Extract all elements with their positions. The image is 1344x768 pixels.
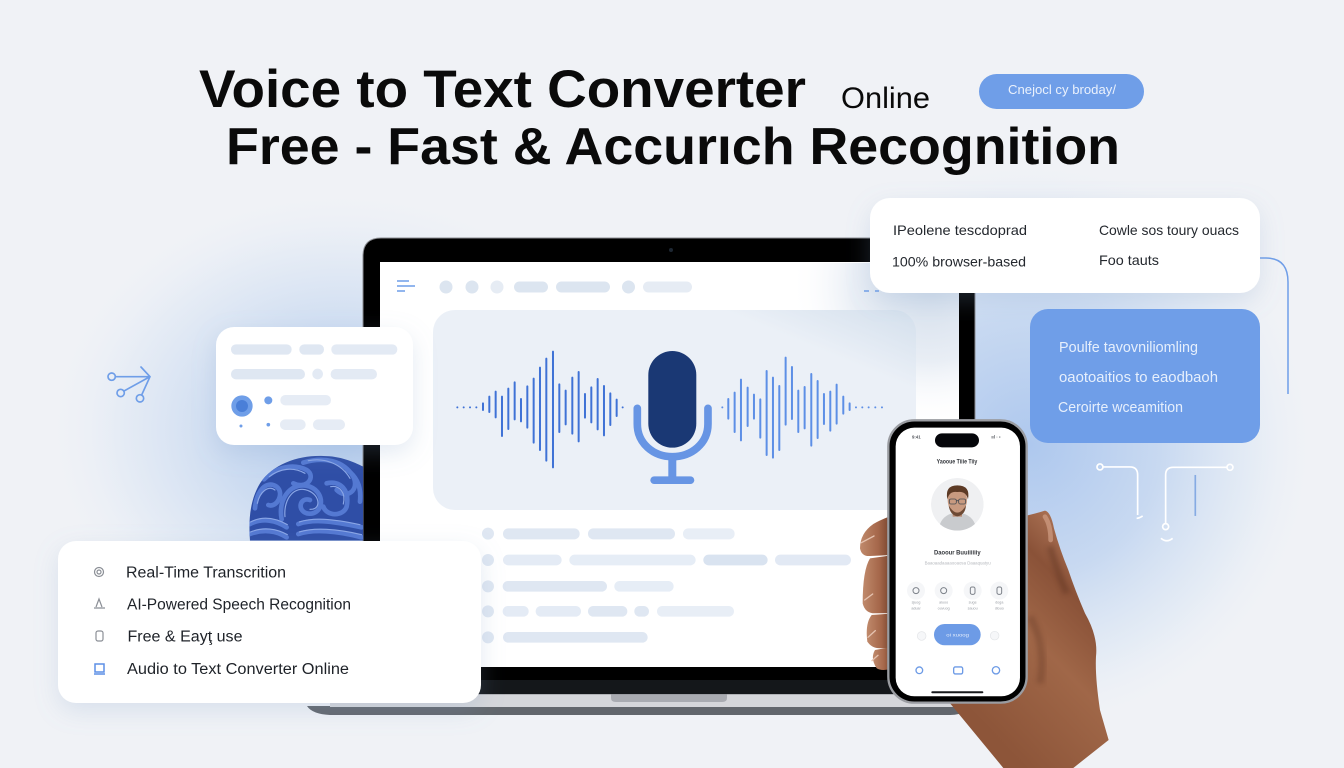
hand holding phone (860, 511, 1109, 768)
phone action icons: sauou (968, 607, 978, 611)
brain illustration (247, 453, 363, 543)
phone action icons: dlouo (995, 607, 1004, 611)
laptop screen (380, 262, 959, 667)
screen tiny arrows (864, 290, 879, 292)
fingers (860, 515, 893, 670)
screen toolbar (440, 280, 692, 294)
status bar (912, 435, 1001, 440)
screen text placeholder rows (482, 528, 851, 643)
smartphone (888, 420, 1027, 703)
background glow right (740, 155, 1320, 735)
call to action button: Cnejocl cy broday/ (1008, 83, 1117, 97)
phone primary button (934, 624, 981, 645)
blue info card: oaotoaitios to eaodbaoh (1059, 370, 1218, 386)
title: Free - Fast & Accurıch Recognition (226, 118, 1120, 176)
phone action icons: suge (969, 601, 977, 605)
phone side buttons (917, 631, 999, 640)
phone action icons: aduar (911, 607, 921, 611)
blue info card: Ceroirte wceamition (1058, 400, 1183, 416)
background glow left (40, 185, 640, 675)
feature: audio to text: Audio to Text Converter Online (127, 661, 349, 678)
palm and wrist (950, 511, 1109, 768)
title (199, 60, 1120, 176)
laptop chin (364, 680, 974, 694)
top right info card: Cowle sos toury ouacs (1099, 222, 1239, 238)
status bar: 9:41 (912, 435, 921, 440)
icon: network nodes (108, 367, 150, 402)
left floating card (216, 327, 413, 445)
feature: real-time transcription: Real-Time Transcrition (126, 564, 286, 582)
dynamic island (935, 433, 979, 447)
phone heading: Yaooue Tiiie Tiiy (937, 459, 978, 466)
top right info card: Foo tauts (1099, 252, 1159, 268)
phone screen (896, 428, 1020, 696)
soundwave left (457, 352, 623, 467)
phone action icons: doga (995, 601, 1004, 605)
blue info card: Poulfe tavovniliomling (1059, 340, 1198, 356)
top right info card: 100% browser-based (892, 254, 1026, 270)
feature: ai speech recognition: AI-Powered Speech Recognition (127, 596, 351, 614)
microphone panel (433, 310, 916, 510)
soundwave right (722, 358, 882, 458)
phone subtitle: Baaoaadaaaaooaosa Daaaquatyu (925, 561, 991, 566)
screen corner shade (790, 263, 959, 428)
phone primary button: oi xuoog (946, 632, 970, 637)
home indicator (931, 691, 983, 693)
thumb highlight (1045, 517, 1051, 540)
card placeholder rows (231, 344, 397, 430)
camera (669, 248, 673, 252)
phone name: Daoour Buuiiiiiiy (934, 550, 981, 557)
connector: top right line (1260, 258, 1288, 394)
feature list card (58, 541, 481, 703)
laptop base (307, 694, 965, 715)
phone bottom nav icons (916, 667, 1000, 674)
phone action icons: sjuog (912, 601, 920, 605)
phone action icons: ouvuog (938, 607, 950, 611)
title: Online (841, 82, 930, 115)
phone body (888, 420, 1027, 703)
screen menu icon (397, 281, 415, 291)
finger highlights (861, 536, 878, 661)
palm and knuckle shading (1030, 547, 1067, 683)
connectors: white circuit lines (1097, 464, 1233, 541)
phone action icons: aluoo (939, 601, 948, 605)
top right info card (870, 198, 1260, 293)
status bar: ııl ◦ ▪ (991, 435, 1001, 440)
call to action button (979, 74, 1144, 109)
laptop bezel (363, 238, 975, 694)
title: Voice to Text Converter (199, 60, 806, 119)
top right info card: IPeolene tescdoprad (893, 222, 1027, 238)
feature: free and easy: Free & Eayţ use (128, 628, 242, 646)
avatar (931, 478, 984, 531)
laptop (307, 238, 975, 715)
phone action icons (907, 582, 1008, 611)
blue info card (1030, 309, 1260, 443)
icon: microphone (637, 351, 708, 484)
